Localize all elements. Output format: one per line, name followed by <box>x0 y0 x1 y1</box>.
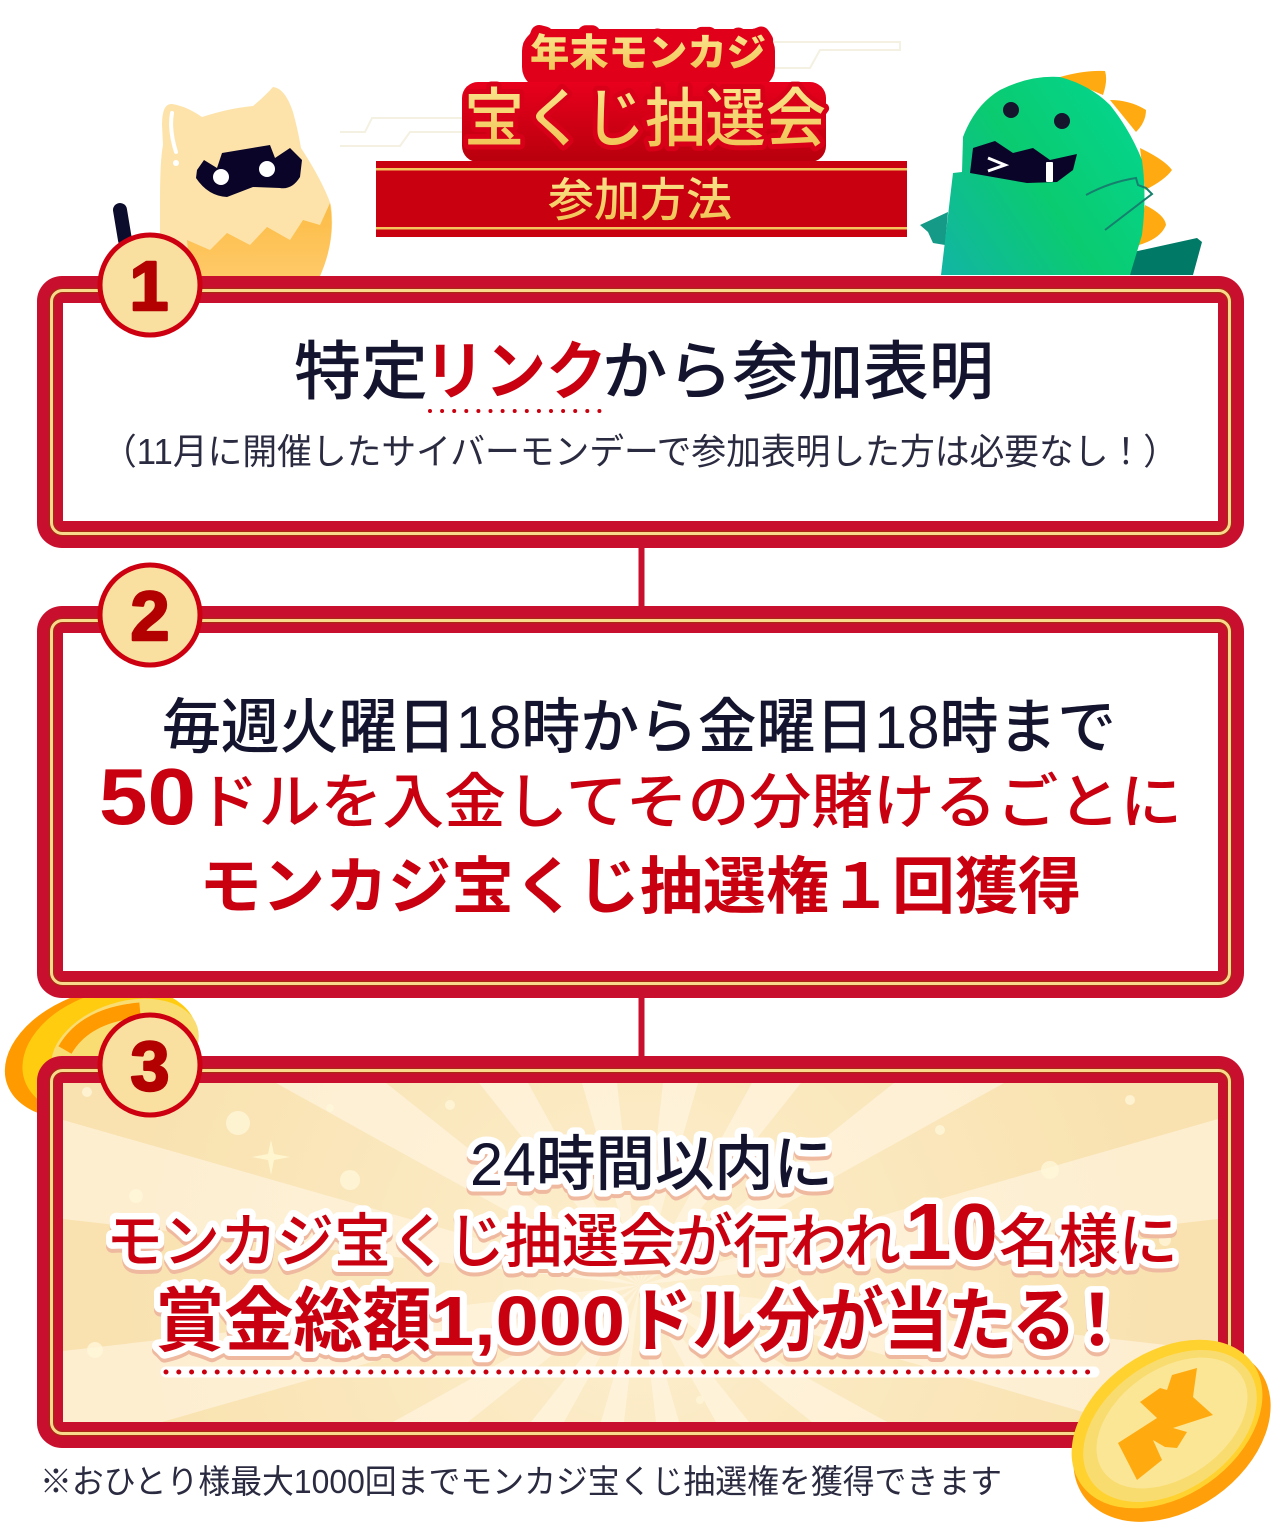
text: step 3 line 2: 名様に <box>999 1209 1178 1275</box>
text: step 3 line 3 <box>155 1282 1132 1360</box>
text: step 3 line 2: モンカジ宝くじ抽選会が行われ <box>106 1209 901 1275</box>
badge: step 1: 1 <box>130 247 168 325</box>
connector: step 1 to 2 <box>638 545 644 609</box>
coin: bottom right <box>1040 1305 1280 1532</box>
footnote: ※おひとり様最大1000回までモンカジ宝くじ抽選権を獲得できます <box>40 1463 1002 1500</box>
panel: step 3 <box>37 1056 1244 1448</box>
dotted underline <box>166 1366 1094 1378</box>
dotted underline <box>430 409 600 413</box>
title line 1: 年末モンカジ <box>530 33 766 75</box>
heading: step 1: から参加表明 <box>602 336 994 408</box>
panel: step 2 <box>37 606 1244 998</box>
text: step 3 line 3: ドル分が当たる <box>628 1282 1076 1360</box>
text: step 2 line 2 <box>99 752 1182 841</box>
title: event logo <box>462 29 826 162</box>
panel: step 1 <box>37 276 1244 548</box>
banner: 参加方法: 参加方法 <box>548 174 732 226</box>
character: green dinosaur <box>920 71 1202 275</box>
badge: step 1 <box>100 235 200 335</box>
title backing plate <box>462 29 826 162</box>
badge: step 3 <box>100 1015 200 1115</box>
note: step 1: （11月に開催したサイバーモンデーで参加表明した方は必要なし！） <box>102 431 1178 472</box>
banner: 参加方法 <box>376 161 907 237</box>
text: step 3 line 3: 1,000 <box>431 1282 625 1360</box>
text: step 2 line 2: ドルを入金してその分賭けるごとに <box>197 769 1182 836</box>
badge: step 3: 3 <box>131 1027 169 1105</box>
heading: step 1: リンク <box>424 336 607 408</box>
text: step 2 line 3: モンカジ宝くじ抽選権１回獲得 <box>199 853 1081 922</box>
text: step 3 line 3: ！ <box>1062 1282 1132 1360</box>
heading: step 1 <box>294 336 994 408</box>
text: step 2 line 1: 毎週火曜日18時から金曜日18時まで <box>162 694 1116 761</box>
text: step 3 line 2: 10 <box>905 1187 998 1276</box>
title line 2: 宝くじ抽選会 <box>464 83 826 155</box>
badge: step 2 <box>100 565 200 665</box>
coin logo <box>1118 1368 1213 1480</box>
text: step 2 line 2: 50 <box>99 752 196 841</box>
text: step 3 line 3: 賞金総額 <box>155 1282 432 1360</box>
text: step 3 line 2 <box>106 1187 1178 1276</box>
heading: step 1: 特定 <box>294 336 428 408</box>
sunburst background <box>63 1083 1218 1422</box>
decorative clouds beside the title <box>340 42 900 146</box>
coin: behind step 3 <box>0 964 214 1142</box>
character: masked cat in egg shell <box>120 87 332 276</box>
badge: step 2: 2 <box>131 577 169 655</box>
connector: step 2 to 3 <box>638 995 644 1059</box>
text: step 3 line 1: 24時間以内に <box>470 1131 833 1198</box>
